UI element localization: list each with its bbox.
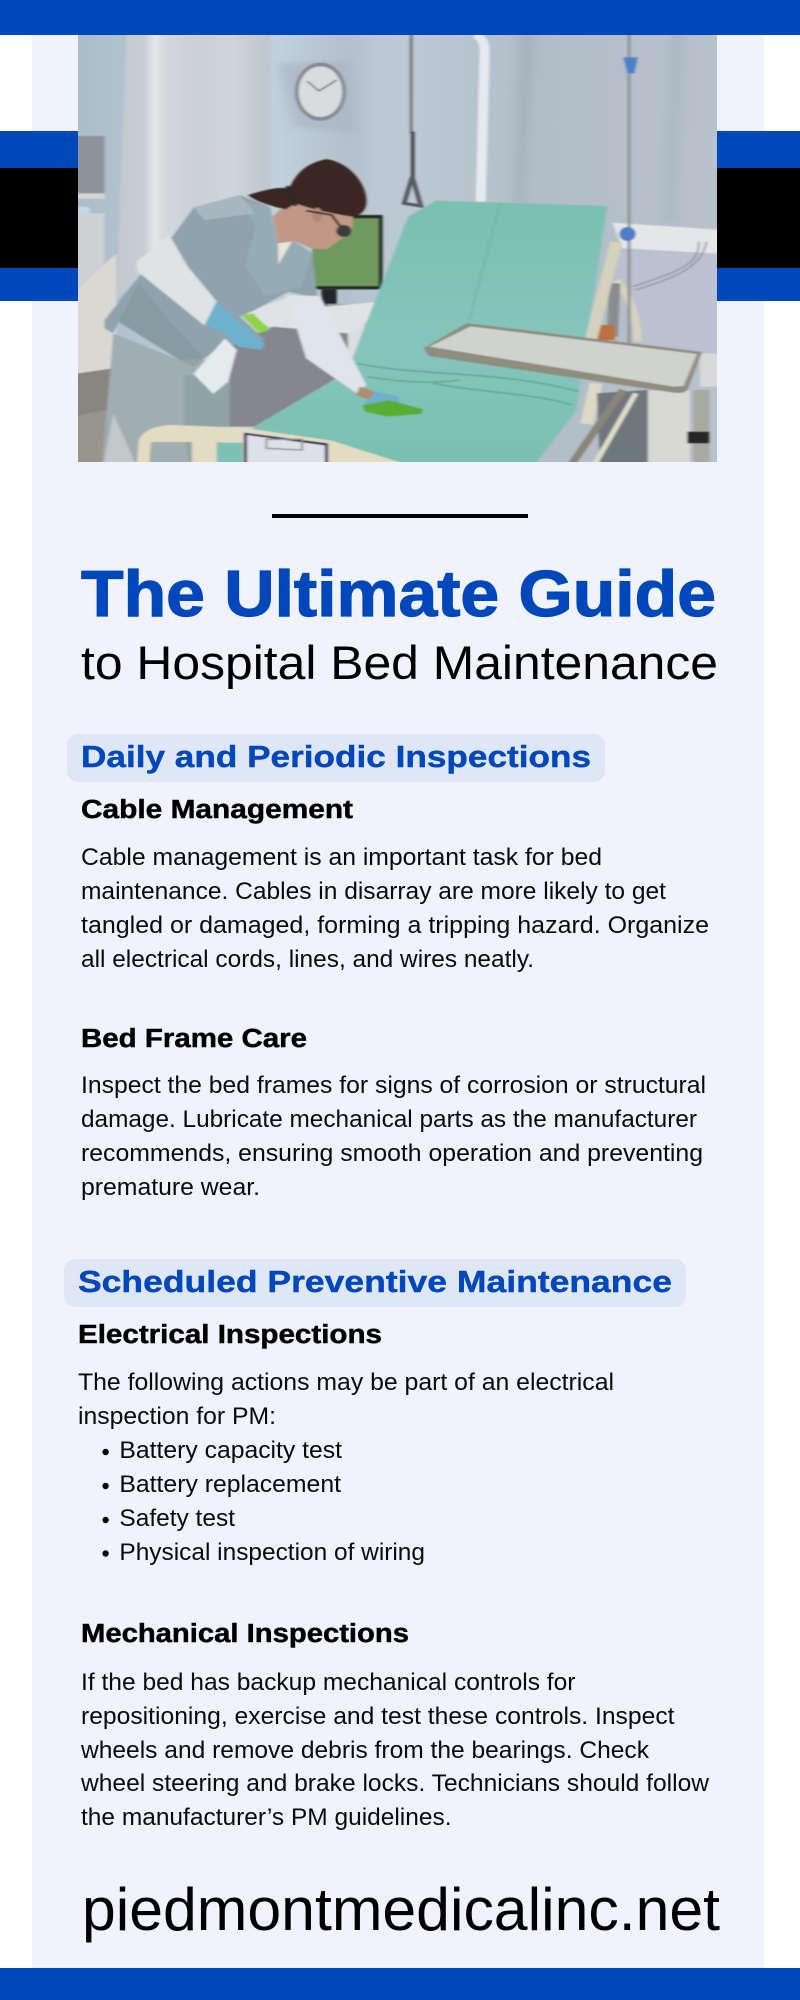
scrub top (105, 195, 317, 367)
section heading pill: Scheduled Preventive Maintenance (78, 1265, 672, 1299)
bullet list: Physical inspection of wiring (119, 1539, 425, 1566)
cable management text: maintenance. Cables in disarray are more likely to get (81, 878, 666, 905)
bed posts (616, 280, 638, 342)
bed frame care text: damage. Lubricate mechanical parts as the manufacturer (81, 1106, 697, 1133)
mechanical inspections text: the manufacturer’s PM guidelines. (81, 1804, 452, 1831)
section: scheduled preventive maintenance (64, 1259, 710, 1831)
clock (295, 63, 346, 121)
white sleeves (137, 235, 217, 326)
top bar (0, 0, 800, 35)
cable management text: all electrical cords, lines, and wires neatly. (81, 946, 534, 973)
photo: cleaner wiping hospital bed (66, 28, 730, 468)
website url: piedmontmedicalinc.net (82, 1876, 720, 1943)
bullet list (102, 1437, 425, 1566)
gloves (205, 302, 265, 350)
glasses (306, 211, 343, 230)
bullet list: Battery replacement (119, 1471, 341, 1498)
section heading pill (64, 1259, 686, 1307)
mechanical inspections text: repositioning, exercise and test these controls. Inspect (81, 1703, 675, 1730)
under-bed floor and frame (597, 390, 648, 467)
mechanical inspections text: If the bed has backup mechanical controls for (81, 1669, 576, 1696)
desk (246, 298, 376, 334)
hair (247, 159, 366, 217)
bed frame care text: Inspect the bed frames for signs of corrosion or structural (81, 1072, 706, 1099)
mechanical inspections text: wheels and remove debris from the bearings. Check (80, 1737, 650, 1764)
bottom bar (0, 1968, 800, 2000)
white rail (474, 35, 485, 202)
overbed table stand (693, 390, 709, 467)
section heading pill: Daily and Periodic Inspections (81, 740, 591, 774)
electrical inspections intro (78, 1369, 614, 1430)
rail (136, 424, 402, 462)
electrical inspections heading: Electrical Inspections (78, 1321, 382, 1349)
mattress (252, 200, 608, 462)
face and neck (273, 202, 353, 249)
stripe band behind photo (0, 131, 800, 301)
electrical inspections intro: The following actions may be part of an electrical (78, 1369, 614, 1396)
drawer (224, 327, 348, 427)
bullet list: Safety test (119, 1505, 235, 1532)
cable management text: tangled or damaged, forming a tripping hazard. Organize (81, 912, 709, 939)
hanging strap (409, 28, 414, 133)
cable management text: Cable management is an important task for bed (81, 844, 602, 871)
clipboard (244, 433, 328, 467)
title (81, 557, 718, 689)
left monitor and cabinet (78, 136, 106, 194)
section heading pill (67, 734, 605, 782)
mechanical inspections text: wheel steering and brake locks. Technicians should follow (80, 1770, 710, 1797)
monitor (312, 215, 383, 289)
cable management heading: Cable Management (81, 796, 354, 824)
iv pole (626, 28, 632, 343)
pants (102, 334, 206, 462)
bottle (193, 338, 237, 394)
bed frame care heading: Bed Frame Care (81, 1025, 307, 1053)
outlet strip (612, 223, 724, 254)
title: The Ultimate Guide (81, 557, 716, 630)
curtain (116, 28, 270, 300)
section: daily and periodic inspections (67, 734, 709, 1201)
left bed (78, 254, 118, 374)
cable management text (81, 844, 709, 973)
electrical inspections intro: inspection for PM: (78, 1403, 276, 1430)
bed frame care text (81, 1072, 706, 1201)
mechanical inspections heading: Mechanical Inspections (81, 1620, 409, 1648)
bed frame care text: recommends, ensuring smooth operation and preventing (81, 1140, 703, 1167)
bed frame care text: premature wear. (81, 1174, 260, 1201)
title divider (272, 514, 528, 518)
title: to Hospital Bed Maintenance (81, 636, 718, 689)
overbed table (424, 323, 702, 393)
bullet list: Battery capacity test (119, 1437, 342, 1464)
mechanical inspections text (80, 1669, 710, 1831)
